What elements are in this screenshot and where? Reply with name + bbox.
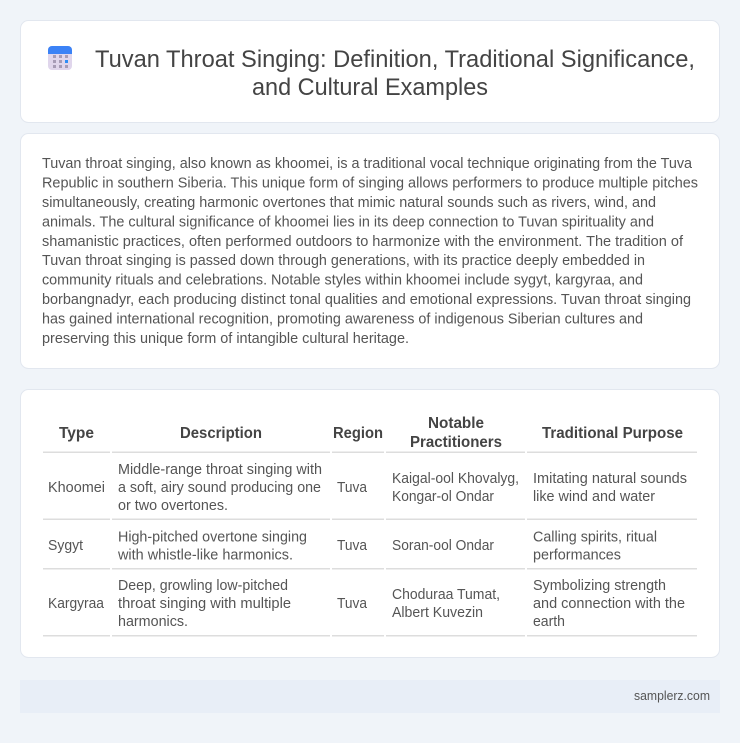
table header row: Region bbox=[333, 425, 383, 442]
table header row: Type bbox=[59, 425, 94, 442]
table row: Sygyt: High-pitched overtone singing bbox=[118, 530, 307, 546]
table row: Khoomei: like wind and water bbox=[533, 489, 655, 505]
table row: Kargyraa: Symbolizing strength bbox=[533, 578, 666, 594]
table header row: Description bbox=[180, 425, 262, 442]
table header row: Notable bbox=[428, 415, 484, 432]
table row: Kargyraa: throat singing with multiple bbox=[118, 596, 291, 612]
table row: Sygyt bbox=[48, 530, 657, 564]
text block: introduction paragraph bbox=[42, 156, 698, 347]
text block: introduction paragraph: borbangnadyr, each producing distinct tonal qualities and emotional expressions. Tuvan throat singing bbox=[42, 292, 691, 308]
table row: Kargyraa: Kargyraa bbox=[48, 596, 104, 612]
table row: Khoomei: Kaigal-ool Khovalyg, bbox=[392, 471, 519, 487]
panel: title card bbox=[20, 20, 720, 122]
table row: Khoomei: Imitating natural sounds bbox=[533, 471, 687, 487]
text block: introduction paragraph: Tuvan throat singing is passed down through generations, with its practice deeply embedded in bbox=[42, 253, 645, 269]
table header row bbox=[59, 415, 683, 451]
table row: Khoomei: Kongar-ol Ondar bbox=[392, 489, 494, 505]
table row: Sygyt: Tuva bbox=[337, 538, 367, 554]
table row: Sygyt: with whistle-like harmonics. bbox=[117, 548, 293, 564]
text block: introduction paragraph: preserving this unique form of intangible cultural heritage. bbox=[42, 331, 409, 347]
text block: introduction paragraph: shamanistic practices, often performed outdoors to harmonize with the environment. The tradition of bbox=[42, 234, 684, 250]
table header row: Traditional Purpose bbox=[542, 425, 683, 442]
table row: Khoomei: Khoomei bbox=[48, 480, 105, 496]
title: and Cultural Examples bbox=[252, 74, 488, 101]
text block: introduction paragraph: animals. The cultural significance of khoomei lies in its deep connection to Tuvan spirituality and bbox=[42, 214, 654, 230]
text block: introduction paragraph: simultaneously, creating harmonic overtones that mimic natural sounds such as rivers, wind, and bbox=[42, 195, 656, 211]
table row: Sygyt: Calling spirits, ritual bbox=[533, 530, 657, 546]
table header row: Practitioners bbox=[410, 434, 502, 451]
title: Tuvan Throat Singing: Definition, Traditional Significance, bbox=[95, 46, 695, 73]
footer: samplerz.com bbox=[634, 689, 710, 703]
table row: Kargyraa: Choduraa Tumat, bbox=[392, 587, 500, 603]
table row: Sygyt: performances bbox=[533, 548, 621, 564]
table row: Kargyraa: and connection with the bbox=[533, 596, 685, 612]
table row: Kargyraa: Albert Kuvezin bbox=[392, 605, 483, 621]
icon: calendar bbox=[48, 46, 72, 70]
footer bbox=[20, 680, 720, 713]
table: throat singing styles bbox=[43, 415, 697, 636]
table row: Sygyt: Soran-ool Ondar bbox=[392, 538, 494, 554]
table row: Kargyraa: harmonics. bbox=[118, 614, 188, 630]
table row: Khoomei: or two overtones. bbox=[118, 498, 228, 514]
table row: Kargyraa bbox=[48, 578, 685, 630]
text block: introduction paragraph: community rituals and celebrations. Notable styles within khoomei include sygyt, kargyraa, and bbox=[42, 273, 643, 289]
table row: Khoomei: Middle-range throat singing with bbox=[118, 462, 322, 478]
table row: Khoomei: Tuva bbox=[337, 480, 367, 496]
text block: introduction paragraph: Tuvan throat singing, also known as khoomei, is a traditional vocal technique originating from the Tuva bbox=[42, 156, 692, 172]
text block: introduction paragraph: Republic in southern Siberia. This unique form of singing allows performers to produce multiple pitches bbox=[42, 175, 698, 191]
text block: introduction paragraph: has gained international recognition, promoting awareness of indigenous Siberian cultures and bbox=[42, 312, 643, 328]
table row: Khoomei bbox=[48, 462, 687, 514]
title bbox=[95, 46, 695, 101]
table row: Sygyt: Sygyt bbox=[48, 538, 83, 554]
table row: Kargyraa: Deep, growling low-pitched bbox=[118, 578, 288, 594]
table row: Kargyraa: Tuva bbox=[337, 596, 367, 612]
panel: introduction bbox=[20, 134, 720, 368]
table row: Kargyraa: earth bbox=[533, 614, 565, 630]
panel: table card bbox=[20, 390, 720, 658]
table row: Khoomei: a soft, airy sound producing one bbox=[118, 480, 321, 496]
